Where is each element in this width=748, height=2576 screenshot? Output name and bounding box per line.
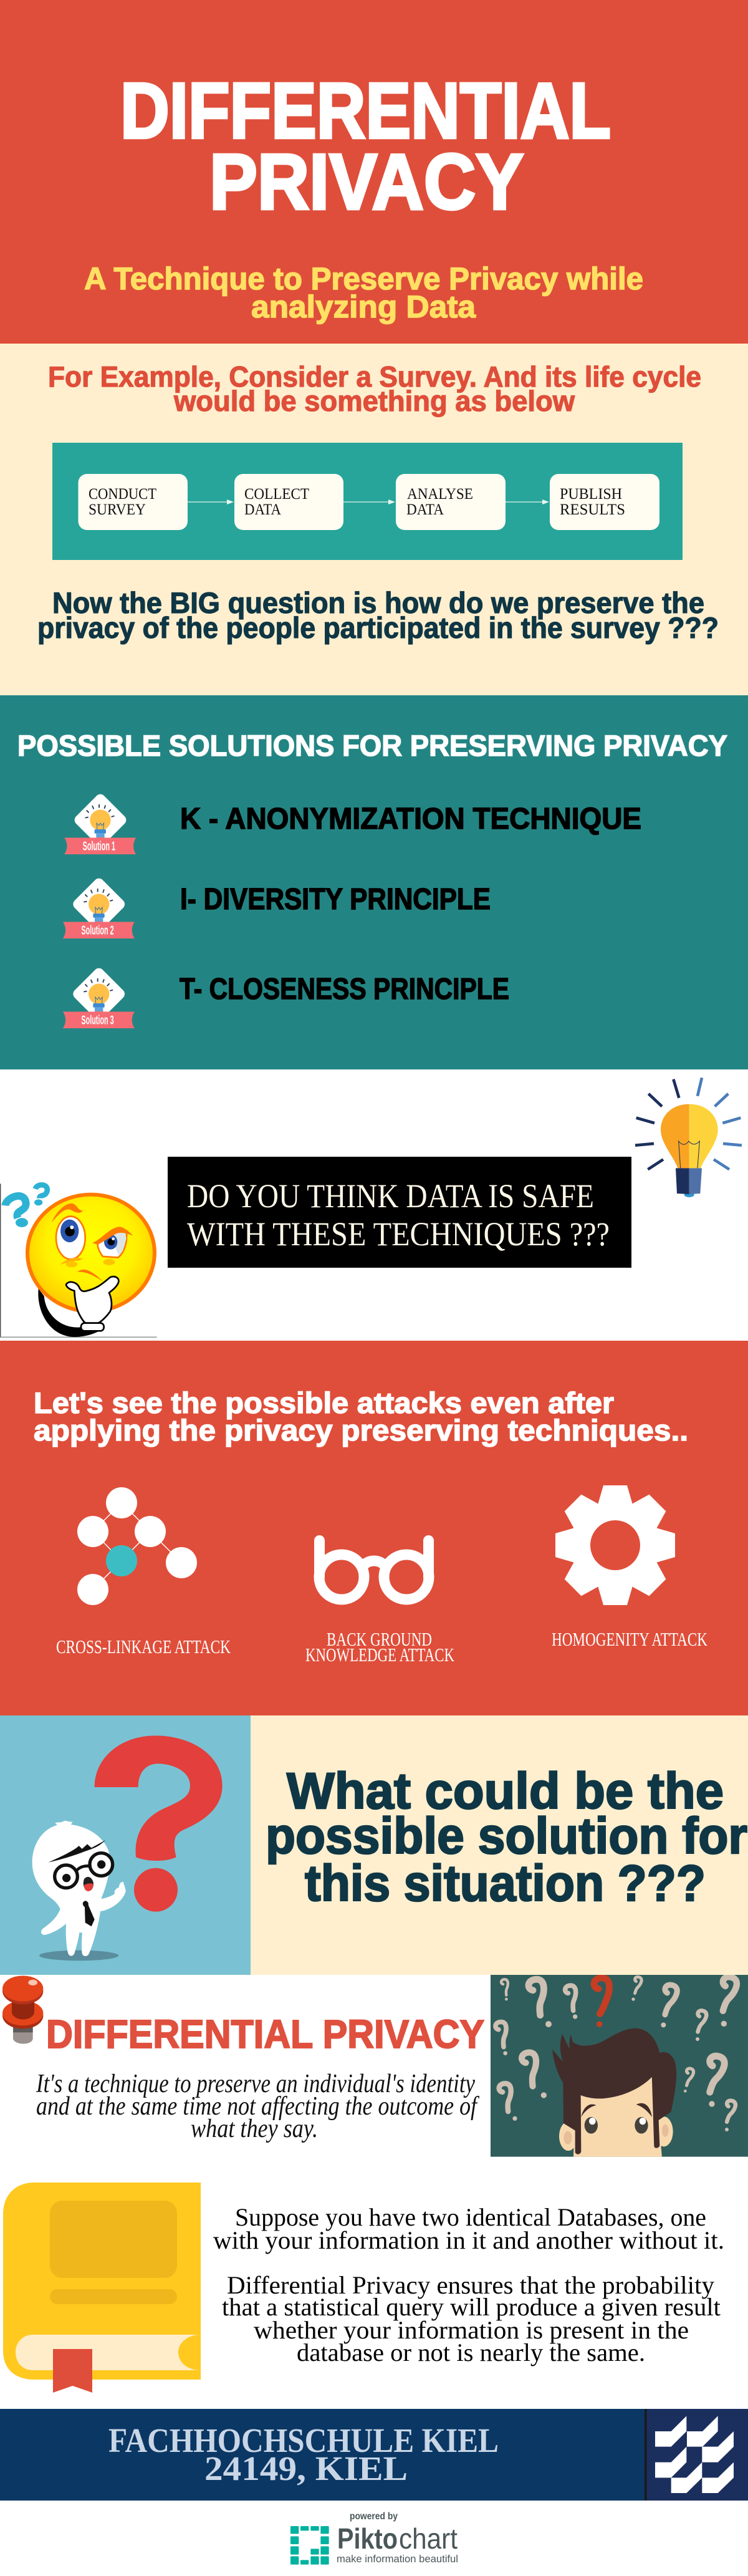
label: cross-linkage attack: CROSS-LINKAGE ATTACK [56,1636,231,1657]
illustration: confused head with question marks [491,1975,748,2158]
panel: explanation [0,2157,748,2409]
heading: attacks: Let's see the possible attacks even after [34,1386,614,1419]
icon: thinking smiley [0,1184,157,1338]
definition text: and at the same time not affecting the outcome of [36,2092,480,2121]
step: analyse data: ANALYSE [407,486,473,503]
panel: possible solution question [0,1715,748,1975]
explanation text: that a statistical query will produce a given result [222,2293,721,2321]
step: publish results: RESULTS [560,501,625,518]
flow diagram [52,443,683,560]
icon: network nodes [77,1487,197,1605]
question text: What could be the [287,1763,724,1820]
step: conduct survey: SURVEY [89,501,146,518]
icon: question man [32,1735,223,1961]
arrow [506,499,549,504]
piktochart wordmark: Pikto [337,2522,398,2555]
definition text [36,2070,480,2143]
heading: survey example [48,360,701,417]
panel: possible solutions [0,695,748,1069]
label: t-closeness: T- CLOSENESS PRINCIPLE [180,973,509,1006]
icon: solution 1 badge: Solution 1 [83,839,115,853]
icon: glasses [319,1540,429,1599]
big question text [37,586,719,644]
callout: is data safe: DO YOU THINK DATA IS SAFE [187,1177,594,1215]
heading: attacks: applying the privacy preserving techniques.. [34,1414,688,1447]
question text: this situation ??? [305,1855,706,1912]
big question text: Now the BIG question is how do we preserve the [52,586,704,619]
explanation text: Differential Privacy ensures that the probability [227,2271,714,2299]
heading: attacks [34,1386,688,1447]
explanation text: Suppose you have two identical Databases, one [235,2203,706,2231]
arrow [343,499,395,504]
step: analyse data: DATA [406,501,444,518]
heading: possible solutions: POSSIBLE SOLUTIONS FOR PRESERVING PRIVACY [17,729,727,762]
heading: survey example: For Example, Consider a Survey. And its life cycle [48,360,701,393]
label: l-diversity: I- DIVERSITY PRINCIPLE [180,883,491,916]
footer text: FACHHOCHSCHULE KIEL [108,2421,499,2459]
title: PRIVACY [209,138,524,226]
footer text [108,2421,499,2487]
icon: solution 2 badge: Solution 2 [81,923,114,937]
step: collect data: COLLECT [244,486,309,503]
step: analyse data [396,474,506,530]
heading: survey example: would be something as below [173,385,575,417]
icon: push pin [2,1975,43,2043]
definition text: It's a technique to preserve an individual's identity [36,2070,475,2098]
label: background knowledge attack: BACK GROUND [327,1628,432,1650]
panel: title header [0,0,748,344]
big question text: privacy of the people participated in the survey ??? [37,611,719,644]
title [120,67,611,226]
icon: piktochart logo [290,2526,329,2565]
panel: differential privacy definition [0,1975,748,2158]
step: collect data: DATA [244,501,281,518]
callout: is data safe: WITH THESE TECHNIQUES ??? [187,1215,610,1253]
subtitle: A Technique to Preserve Privacy while [84,261,643,296]
explanation text: whether your information is present in the [254,2316,689,2344]
piktochart wordmark [337,2522,458,2565]
title: DIFFERENTIAL [120,67,611,155]
label: background knowledge attack: KNOWLEDGE ATTACK [305,1644,454,1666]
icon: solution 1 badge [64,792,136,854]
piktochart wordmark: chart [399,2522,458,2555]
icon: book [3,2183,201,2393]
question text [266,1763,747,1912]
step: publish results: PUBLISH [560,486,622,503]
step: conduct survey: CONDUCT [89,486,156,503]
subtitle: analyzing Data [251,289,476,324]
panel: survey life cycle [0,344,748,695]
arrow [188,499,234,504]
footer text: 24149, KIEL [204,2449,408,2487]
icon: solution 2 badge [63,876,135,938]
label: k-anonymization: K - ANONYMIZATION TECHNIQUE [180,803,641,836]
icon: gear [555,1485,675,1605]
panel: footer [0,2409,748,2502]
explanation text [213,2203,724,2366]
subtitle [84,261,643,324]
icon: solution 3 badge [63,966,135,1028]
panel: is data safe [0,1069,748,1341]
explanation text: with your information in it and another without it. [213,2226,724,2254]
step: conduct survey [79,474,188,530]
branding: piktochart [0,2501,748,2576]
icon: light bulb [635,1078,742,1197]
powered by text: powered by [350,2511,398,2522]
icon: university logo [645,2409,748,2502]
heading: differential privacy: DIFFERENTIAL PRIVACY [46,2012,484,2057]
explanation text: database or not is nearly the same. [297,2338,645,2366]
callout: is data safe [168,1157,631,1268]
label: background knowledge attack [305,1628,454,1666]
piktochart wordmark: make information beautiful [337,2553,458,2565]
panel: possible attacks [0,1341,748,1715]
definition text: what they say. [191,2115,318,2143]
step: collect data [234,474,343,530]
step: publish results [550,474,659,530]
icon: solution 3 badge: Solution 3 [81,1013,114,1027]
